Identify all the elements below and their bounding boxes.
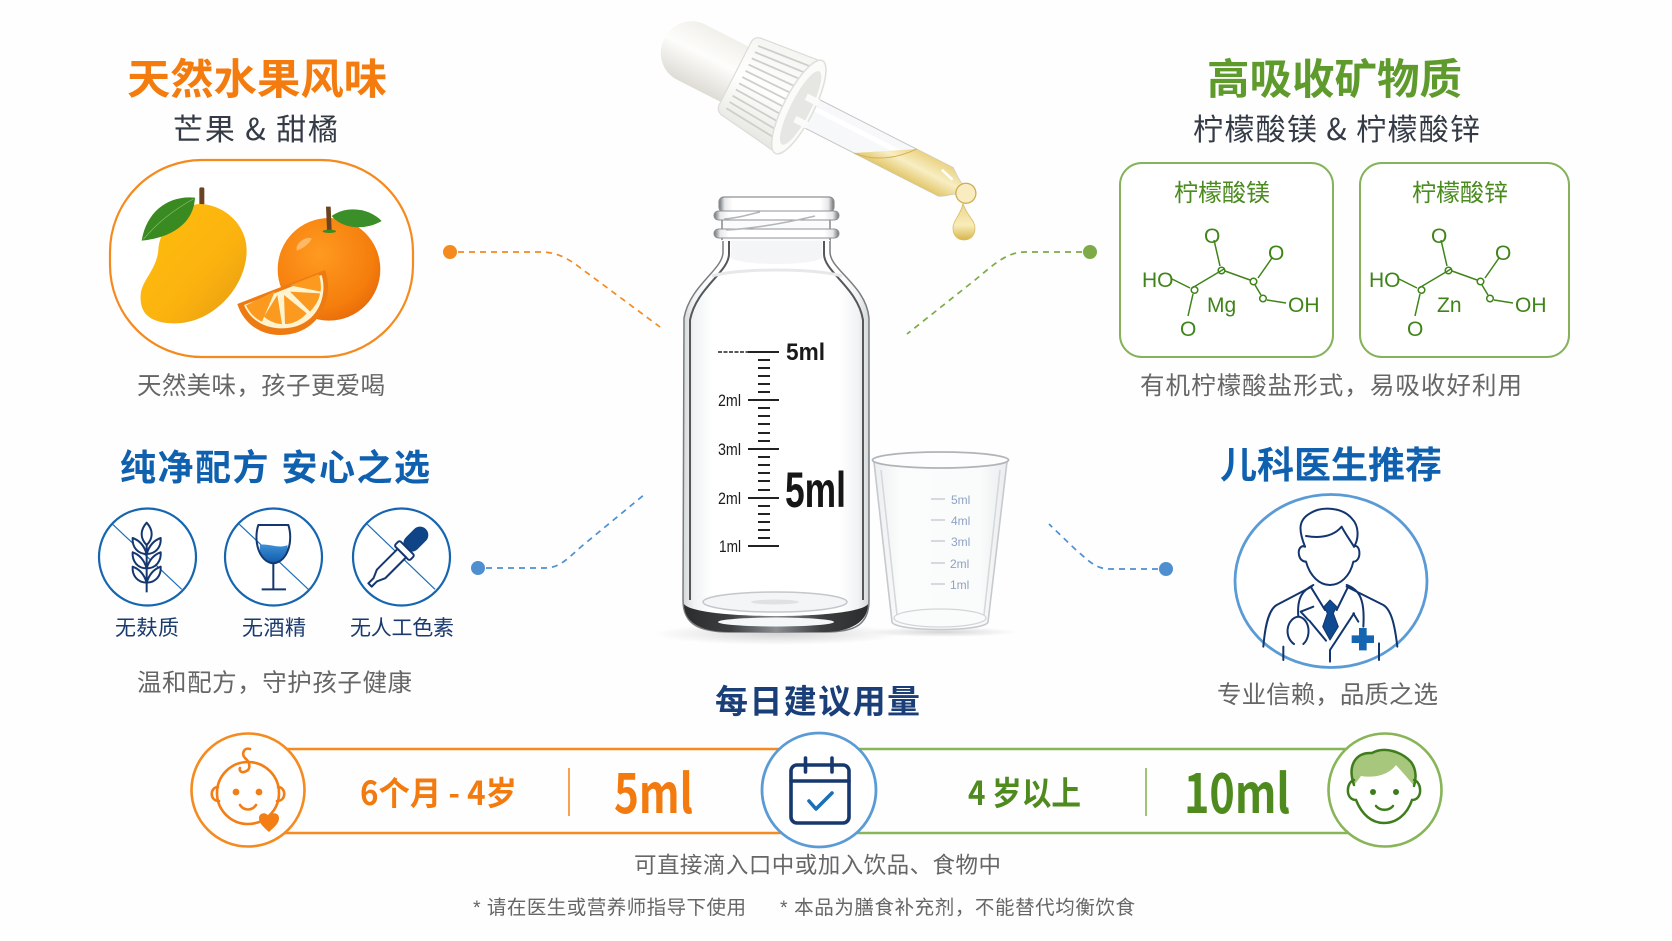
subheading: mango and tangerine: 芒果 & 甜橘 xyxy=(173,105,338,149)
molecule: Mg: O xyxy=(1204,225,1220,248)
cup scale labels: 1ml xyxy=(950,578,969,592)
label: no artificial colour: 无人工色素 xyxy=(350,617,454,640)
orange band: 6 months to 4 years: 5ml xyxy=(614,750,693,829)
connector: orange dashed arrow xyxy=(443,245,660,327)
molecule: Zn: HO xyxy=(1369,269,1400,292)
panel: pure formula xyxy=(99,447,454,697)
icon: no alcohol xyxy=(225,508,322,606)
connector: blue dashed arrow left xyxy=(471,494,645,575)
panel: natural fruit flavour xyxy=(110,56,413,400)
caption: gentle formula: 温和配方，守护孩子健康 xyxy=(137,669,412,697)
cup scale labels: 2ml xyxy=(950,557,969,571)
panel: paediatrician recommended xyxy=(1217,445,1442,709)
cup scale labels: 4ml xyxy=(951,514,970,528)
cup scale labels: 5ml xyxy=(951,493,970,507)
connector: blue dashed arrow right xyxy=(1049,524,1173,576)
cup scale labels: 3ml xyxy=(951,535,970,549)
icon: dropper xyxy=(641,0,999,243)
molecule: Zn xyxy=(1369,225,1546,341)
orange band: 6 months to 4 years: 6个月 - 4岁 xyxy=(360,767,517,815)
card: zinc citrate: 柠檬酸锌 xyxy=(1412,180,1508,207)
heading: minerals: 高吸收矿物质 xyxy=(1207,56,1462,103)
molecule: Zn: O xyxy=(1495,242,1511,265)
icon: no gluten xyxy=(99,508,196,606)
molecule: Zn: O xyxy=(1407,318,1423,341)
molecule: Zn: OH xyxy=(1515,294,1546,317)
green band: over 4 years xyxy=(819,749,1385,833)
bottle scale labels: 2ml xyxy=(718,490,741,508)
label: no alcohol: 无酒精 xyxy=(242,617,306,640)
green band: over 4 years: 4 岁以上 xyxy=(968,767,1081,815)
icon: doctor in circle xyxy=(1235,494,1427,668)
subheading: citrates: 柠檬酸镁 & 柠檬酸锌 xyxy=(1193,105,1480,149)
icon: calendar xyxy=(762,733,876,847)
measurement ticks xyxy=(718,352,779,546)
instruction text: 可直接滴入口中或加入饮品、食物中 xyxy=(634,853,1001,878)
molecule: Mg: OH xyxy=(1288,294,1320,317)
bottle label: 5ml top: 5ml xyxy=(786,339,825,366)
caption: doctor: 专业信赖，品质之选 xyxy=(1217,681,1438,709)
cup scale labels xyxy=(950,493,970,592)
panel: dosage bar xyxy=(192,733,1442,847)
card: magnesium citrate xyxy=(1120,163,1333,357)
label: no gluten: 无麸质 xyxy=(115,617,179,640)
card: magnesium citrate: 柠檬酸镁 xyxy=(1174,180,1270,207)
bottle scale labels xyxy=(718,392,741,556)
molecule: Mg xyxy=(1142,225,1320,341)
fruit pill frame xyxy=(110,160,413,357)
molecule: Mg: Mg xyxy=(1207,294,1236,317)
heading: doctor: 儿科医生推荐 xyxy=(1220,445,1442,486)
caption: minerals: 有机柠檬酸盐形式，易吸收好利用 xyxy=(1140,372,1522,400)
heading: fruit flavour: 天然水果风味 xyxy=(127,56,387,103)
icon: no artificial colour xyxy=(353,508,450,606)
card: zinc citrate xyxy=(1360,163,1569,357)
heading: daily dosage: 每日建议用量 xyxy=(715,683,920,720)
icon: baby xyxy=(192,734,304,846)
molecule: Mg: O xyxy=(1268,242,1284,265)
heading: pure formula: 纯净配方 安心之选 xyxy=(120,447,430,488)
icon: tangerine with slice xyxy=(237,207,382,335)
icon: boy xyxy=(1328,734,1442,846)
panel: high-absorption minerals xyxy=(1120,56,1569,400)
bottle scale labels: 2ml xyxy=(718,392,741,410)
caption: fruit: 天然美味，孩子更爱喝 xyxy=(137,372,385,400)
green band: over 4 years: 10ml xyxy=(1184,750,1290,829)
footnote 2: * 本品为膳食补充剂，不能替代均衡饮食 xyxy=(780,897,1135,919)
connector: green dashed arrow xyxy=(907,245,1097,334)
molecule: Mg: O xyxy=(1180,318,1196,341)
bottle label: 5ml large: 5ml xyxy=(785,462,846,518)
icon: glass bottle xyxy=(653,197,903,645)
footnote 1: * 请在医生或营养师指导下使用 xyxy=(473,897,746,919)
molecule: Mg: HO xyxy=(1142,269,1174,292)
bottle scale labels: 3ml xyxy=(718,441,741,459)
icon: mango xyxy=(141,187,247,323)
orange band: 6 months to 4 years xyxy=(248,749,819,833)
molecule: Zn: Zn xyxy=(1437,294,1462,317)
bottle scale labels: 1ml xyxy=(719,538,741,556)
icon: measuring cup xyxy=(867,452,1017,637)
molecule: Zn: O xyxy=(1431,225,1447,248)
